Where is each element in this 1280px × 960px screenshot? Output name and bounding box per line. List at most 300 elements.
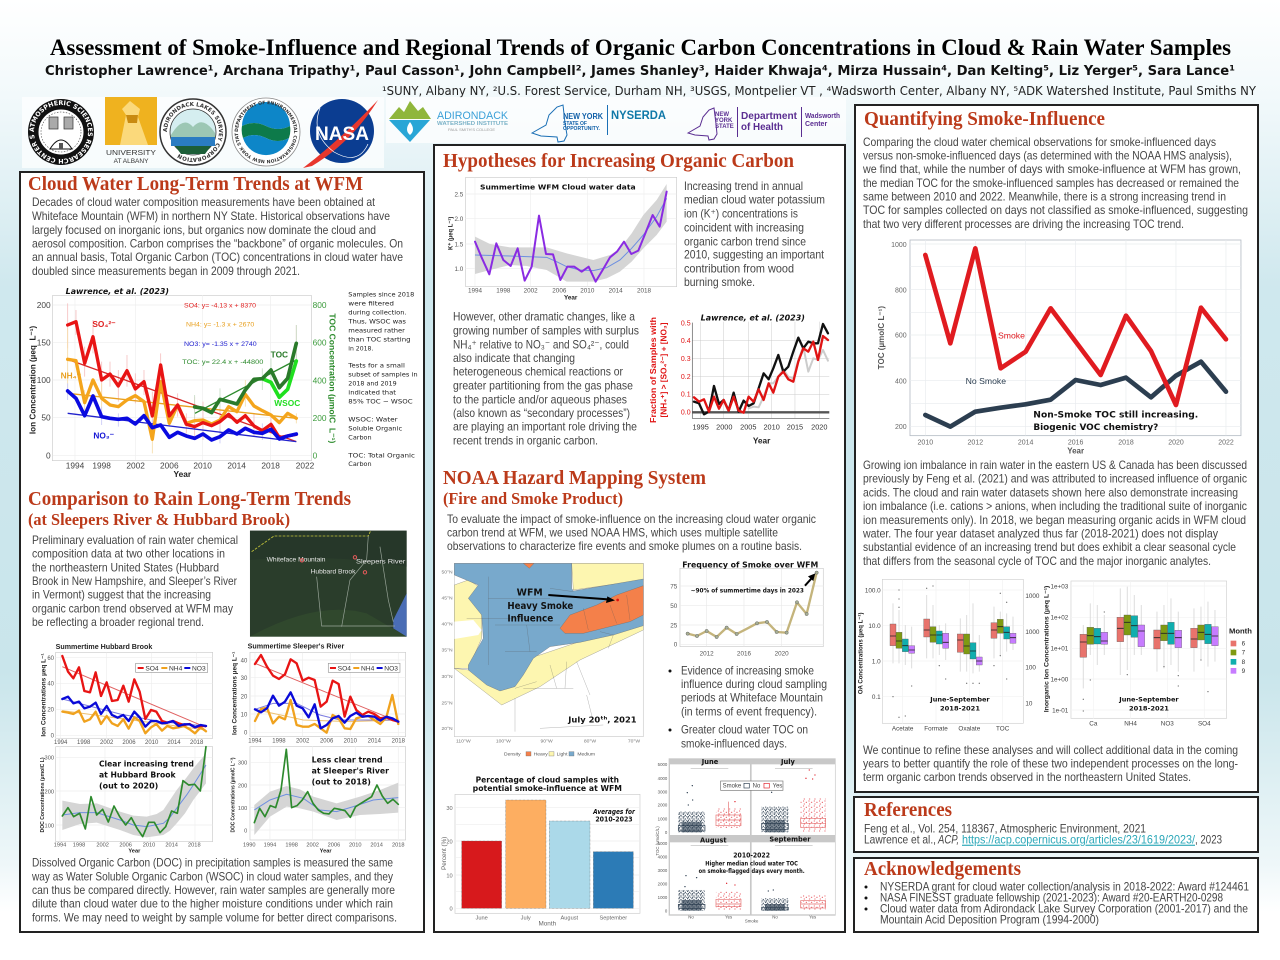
text block: secondary processes: greater partitioning from the gas phase — [453, 379, 633, 392]
legend — [136, 663, 208, 672]
chart: potassium trend: 2014 — [609, 288, 623, 295]
reference list: ACP, — [937, 834, 959, 847]
chart: percentage of cloud samples with smoke influence: Month — [539, 920, 557, 927]
chart: organic acid and TOC boxplots — [858, 579, 1040, 732]
text block: rain intro: composition data at two other locations in — [32, 548, 225, 561]
chart: organic acid and TOC boxplots: June-September — [929, 697, 991, 704]
legend: month: 7 — [1242, 650, 1246, 657]
text block: secondary processes: growing number of samples with surplus — [453, 324, 639, 337]
chart: fraction of samples with ammonium surplus: Lawrence, et al. (2023) — [701, 314, 805, 323]
logo: New York State NYSERDA: OPPORTUNITY. — [563, 126, 601, 132]
legend: NH4 — [169, 665, 183, 672]
chart: inorganic ion boxplots: SO4 — [1198, 721, 1211, 728]
chart: frequency of smoke over WFM: 0 — [674, 642, 678, 649]
heading: cloud water trends: Cloud Water Long-Term Trends at WFM — [28, 173, 363, 195]
heading: hypotheses: Hypotheses for Increasing Organic Carbon — [443, 150, 795, 172]
logo: NASA: NASA — [315, 124, 369, 145]
chart: inorganic ion boxplots: Inorganic Ion Concentrations (µeq L⁻¹) — [1044, 586, 1051, 712]
logo: University at Albany — [105, 97, 157, 165]
chart: TOC smoke vs no smoke: 2020 — [1168, 439, 1184, 446]
series labels: NO₃⁻ — [93, 431, 114, 441]
text block: rain intro: organic carbon trend observed at WFM may — [32, 602, 233, 615]
chart: percentage of cloud samples with smoke influence: 30 — [446, 806, 453, 812]
series labels: TOC — [271, 349, 288, 359]
chart: Sleepers River DOC: 300 — [238, 761, 247, 767]
chart: fraction of samples with ammonium surplus: 0.3 — [681, 356, 691, 363]
chart: TOC smoke vs no smoke: TOC (µmolC L⁻¹) — [877, 306, 886, 369]
map: satellite view of sites — [250, 531, 407, 637]
axes: 0 — [46, 451, 51, 461]
chart: Summertime Hubbard Brook ions — [40, 644, 213, 746]
chart: ion and TOC concentration long-term trend — [27, 287, 418, 479]
annotation — [312, 756, 389, 786]
chart: TOC smoke vs no smoke: 2012 — [968, 439, 983, 446]
text block: secondary processes: However, other dramatic changes, like a — [453, 311, 635, 324]
chart: TOC smoke vs no smoke: No Smoke — [966, 376, 1006, 386]
chart: Summertime Sleeper's River ions: 2014 — [368, 738, 382, 744]
axes: 50 — [41, 413, 51, 423]
chart: Summertime Hubbard Brook ions: 2002 — [100, 740, 114, 746]
text block: secondary processes: heterogeneous chemical reactions or — [453, 366, 623, 379]
coordinates: 100°W — [496, 738, 511, 744]
notes on samples: measured rather — [348, 328, 405, 335]
chart: Summertime Sleeper's River ions: 30 — [241, 676, 248, 682]
legend: Yes — [773, 784, 782, 790]
text block: secondary processes: are playing an important role driving the — [453, 421, 637, 434]
chart: percentage of cloud samples with smoke influence: 0 — [450, 907, 453, 913]
chart: organic acid and TOC boxplots: 10 — [1025, 700, 1033, 707]
legend: month: 9 — [1242, 668, 1246, 675]
chart: monthly TOC on smoke vs no-smoke days: 3000 — [658, 789, 668, 794]
chart: Summertime Hubbard Brook ions: 1994 — [54, 740, 68, 746]
text block: rain intro: Brook in New Hampshire, and Sleeper’s River — [32, 575, 237, 588]
chart: TOC smoke vs no smoke: Biogenic VOC chemistry? — [1033, 423, 1158, 433]
chart: percentage of cloud samples with smoke influence: 10 — [446, 873, 453, 879]
text block: DOC comparison: way as Water Soluble Organic Carbon (WSOC) in cloud water samples, and they — [31, 870, 393, 883]
coordinates: 80°W — [584, 738, 596, 744]
map: HMS smoke density: WFM — [517, 588, 543, 599]
text block: secondary processes — [453, 311, 639, 447]
chart: Sleepers River DOC: 200 — [238, 783, 247, 789]
chart: frequency of smoke over WFM: 2016 — [737, 651, 751, 658]
map: HMS smoke density: July 20ᵗʰ, 2021 — [567, 715, 637, 725]
axes: 400 — [313, 376, 327, 386]
chart: Summertime Hubbard Brook ions: 2018 — [190, 740, 204, 746]
reference list: Lawrence et al., — [864, 834, 936, 847]
text block: HMS intro: carbon trend at WFM, we used NOAA HMS, which uses multiple satellite — [447, 526, 778, 540]
chart: Summertime Hubbard Brook ions: 2014 — [167, 740, 181, 746]
regression equations: TOC: y= 22.4 x + -44800 — [182, 359, 264, 366]
regression equations — [182, 302, 264, 366]
chart: potassium trend: 2010 — [580, 288, 595, 295]
text block: potassium hypothesis: ion (K⁺) concentrations is — [684, 208, 798, 221]
chart: Hubbard Brook DOC: 2014 — [165, 843, 178, 849]
chart: monthly TOC on smoke vs no-smoke days: 0 — [665, 908, 668, 913]
chart: Hubbard Brook DOC: 1994 — [54, 843, 66, 849]
chart: Sleepers River DOC: DOC Concentrations (µmolC L⁻¹) — [230, 757, 237, 832]
logo: Adirondack Watershed Institute — [389, 101, 509, 142]
text block: ion imbalance: that differs from the seasonal cycle of TOC and the major inorganic analytes. — [863, 555, 1211, 568]
panel: acknowledgements — [854, 858, 1258, 932]
text block: ion imbalance — [862, 459, 1247, 568]
chart: ion and TOC concentration long-term trend: Lawrence, et al. (2023) — [66, 287, 169, 296]
chart: organic acid and TOC boxplots: Acetate — [892, 725, 914, 732]
chart: Summertime Hubbard Brook ions: Summertime Hubbard Brook — [56, 644, 152, 651]
axes: 1998 — [92, 461, 111, 471]
text block: evidence bullets — [668, 664, 827, 750]
chart: TOC smoke vs no smoke: 400 — [895, 378, 907, 385]
annotation: Clear increasing trend — [99, 760, 194, 769]
text block: secondary processes: NH₄⁺ relative to NO₃⁻ and SO₄²⁻, could — [453, 338, 629, 351]
text block: cloud water intro: Whiteface Mountain (WFM) in northern NY State. Historical observations have — [32, 210, 390, 223]
map: HMS smoke density: Heavy Smoke — [507, 601, 573, 612]
axes: 800 — [313, 300, 327, 310]
chart: monthly TOC on smoke vs no-smoke days: 2000 — [658, 882, 668, 887]
authors: Christopher Lawrence¹, Archana Tripathy¹, Paul Casson¹, John Campbell², James Shanley³, Haider Khwaja⁴, Mirza Hussain⁴, Dan Kelting⁵, Liz Yerger⁵, Sara Lance¹ — [45, 63, 1235, 79]
legend: Medium — [577, 752, 595, 758]
coordinates: 25°N — [442, 700, 453, 706]
heading: acknowledgements: Acknowledgements — [864, 858, 1021, 880]
boxes — [678, 823, 788, 910]
chart: potassium trend: 2.0 — [455, 216, 464, 223]
chart: fraction of samples with ammonium surplus: 0.2 — [681, 374, 691, 381]
chart: Summertime Sleeper's River ions: 40 — [241, 658, 248, 664]
chart: monthly TOC on smoke vs no-smoke days: Smoke — [745, 919, 759, 924]
notes on samples: Thus, WSOC was — [347, 319, 406, 326]
notes on samples: than TOC starting — [348, 337, 411, 344]
text block: potassium hypothesis: Increasing trend in annual — [684, 180, 803, 193]
legend: month: Month — [1229, 627, 1252, 636]
legend: SO4 — [338, 665, 351, 672]
medium smoke — [454, 563, 643, 691]
regression equations: SO4: y= -4.13 x + 8370 — [184, 302, 256, 309]
logo: New York State NYSERDA: NYSERDA — [611, 108, 666, 122]
coordinates: 30°N — [442, 674, 453, 680]
annotation: at Sleeper's River — [312, 766, 389, 775]
chart: Hubbard Brook DOC: 300 — [45, 756, 54, 762]
heading: quantifying: Quantifying Smoke-Influence — [864, 108, 1105, 130]
panel: middle column hypotheses and HMS — [434, 145, 845, 932]
chart: frequency of smoke over WFM: 2020 — [775, 651, 789, 658]
chart: fraction of samples with ammonium surplus: 0.1 — [681, 392, 691, 399]
heading: NOAA HMS: (Fire and Smoke Product) — [443, 489, 623, 508]
notes on samples: TOC: Total Organic — [347, 452, 416, 459]
chart: Sleepers River DOC: 2014 — [370, 843, 383, 849]
chart: monthly TOC on smoke vs no-smoke days: 5000 — [658, 762, 668, 767]
chart: fraction of samples with ammonium surplus: 2005 — [740, 423, 756, 432]
arrow to WFM — [548, 595, 619, 603]
notes on samples: subset of samples in — [348, 371, 418, 378]
annotation — [99, 760, 194, 790]
acknowledgement list: Mountain Acid Deposition Program (1994-2000) — [880, 913, 1099, 926]
axes: 600 — [313, 338, 327, 348]
text block: cloud water intro: Decades of cloud water composition measurements have been obtained at — [32, 196, 376, 209]
facet titles: June — [701, 758, 719, 766]
chart: inorganic ion boxplots: 1e-01 — [1052, 707, 1069, 714]
series labels: SO₄²⁻ — [92, 319, 115, 329]
chart: monthly TOC on smoke vs no-smoke days: Yes — [725, 915, 732, 920]
chart: potassium trend: 2.5 — [455, 191, 464, 198]
regression equations: NH4: y= -1.3 x + 2670 — [186, 322, 255, 329]
text block: ion imbalance: ion imbalance (i.e. cations > anions, when including the traditional suite of inorganic — [863, 500, 1247, 513]
chart: monthly TOC on smoke vs no-smoke days: 3000 — [658, 868, 668, 873]
logo: New York Department of Health Wadsworth Center: Department — [741, 110, 797, 122]
logo: NASA — [303, 99, 378, 168]
chart: Sleepers River DOC: 2018 — [392, 843, 405, 849]
chart: monthly TOC on smoke vs no-smoke days: 4000 — [658, 854, 668, 859]
chart: percentage of cloud samples with smoke influence: August — [561, 916, 579, 922]
chart: inorganic ion boxplots: Ca — [1089, 721, 1098, 728]
chart: monthly TOC on smoke vs no-smoke days: 2000 — [658, 803, 668, 808]
chart: TOC smoke vs no smoke — [877, 240, 1241, 455]
chart: frequency of smoke over WFM: 25 — [670, 622, 678, 629]
chart: TOC smoke vs no smoke: Non-Smoke TOC still increasing. — [1033, 410, 1198, 420]
heading: NOAA HMS: NOAA Hazard Mapping System — [443, 467, 706, 489]
map: HMS smoke density: Influence — [507, 613, 553, 624]
chart: Hubbard Brook DOC: DOC Concentrations (µmolC L) — [40, 757, 46, 832]
chart: monthly TOC on smoke vs no-smoke days: 0 — [665, 830, 668, 835]
chart: organic acid and TOC boxplots: 1000 — [1025, 629, 1040, 636]
axes: 2014 — [227, 461, 246, 471]
chart: monthly TOC on smoke vs no-smoke days: Yes — [809, 915, 816, 920]
chart: TOC smoke vs no smoke: 2014 — [1018, 439, 1034, 446]
text block: secondary processes: (also known as “secondary processes”) — [453, 407, 630, 420]
text block: smoke vs non-smoke: TOC for samples collected on days not classified as smoke-influenced, suggesting — [863, 204, 1248, 217]
map: satellite view of sites: Sleepers River — [356, 558, 406, 565]
axes: 2002 — [126, 461, 145, 471]
text block: rain intro — [32, 534, 238, 629]
chart: Summertime Sleeper's River ions — [232, 643, 406, 744]
notes on samples: indicated that — [348, 389, 397, 396]
chart: monthly TOC on smoke vs no-smoke days: 4000 — [658, 776, 668, 781]
chart: organic acid and TOC boxplots: 1000 — [1025, 593, 1040, 600]
chart: frequency of smoke over WFM: 75 — [670, 583, 678, 590]
chart: frequency of smoke over WFM — [670, 561, 823, 658]
chart: percentage of cloud samples with smoke influence: July — [521, 916, 531, 922]
text block: DOC comparison: dilute than cloud water due to the higher moisture conditions under which rain — [32, 898, 393, 911]
chart: TOC smoke vs no smoke: 2010 — [918, 439, 933, 446]
notes on samples — [347, 292, 418, 468]
chart: Summertime Sleeper's River ions: Ion Concentrations µeq L⁻¹ — [232, 652, 239, 735]
chart: inorganic ion boxplots: 1e+02 — [1051, 615, 1069, 622]
text block: potassium hypothesis: organic carbon trend since — [684, 235, 806, 248]
annotation — [699, 851, 805, 875]
chart: inorganic ion boxplots: 2018-2021 — [1129, 705, 1169, 712]
axes: 200 — [313, 413, 327, 423]
heading: rain comparison: Comparison to Rain Long-Term Trends — [28, 488, 351, 510]
chart: percentage of cloud samples with smoke influence: Averages for — [592, 808, 635, 816]
chart: potassium trend: 1.5 — [455, 241, 464, 248]
text block: HMS intro: To evaluate the impact of smoke-influence on the increasing cloud water organic — [447, 513, 816, 526]
legend: Smoke — [723, 784, 742, 790]
text block: evidence bullets: influence during cloud sampling — [681, 678, 827, 691]
axes: Ion Concentration (µeq L⁻¹) — [27, 326, 37, 434]
chart: percentage of cloud samples with smoke influence: potential smoke-influence at WFM — [473, 784, 622, 793]
reference list: Feng et al., Vol. 254, 118367, Atmospheric Environment, 2021 — [864, 823, 1146, 836]
text block: smoke vs non-smoke: same between 2010 and 2022. Meanwhile, there is a strong increasing trend in — [863, 190, 1226, 204]
chart: potassium trend: Summertime WFM Cloud water data — [480, 182, 636, 191]
annotation: 2010-2022 — [733, 851, 770, 860]
axes: 150 — [37, 338, 51, 348]
logo: University at Albany: AT ALBANY — [114, 158, 149, 165]
chart: Summertime Sleeper's River ions: 2010 — [344, 738, 358, 744]
notes on samples: in 2018. — [348, 345, 373, 352]
text block: rain intro: the northeastern United States (Hubbard — [32, 561, 219, 574]
text block: HMS intro — [447, 513, 816, 553]
legend: NO3 — [192, 665, 206, 672]
axes: 200 — [37, 300, 51, 310]
chart: Summertime Hubbard Brook ions: 1998 — [77, 740, 91, 746]
series labels: NH₄⁺ — [61, 371, 81, 381]
logo: New York Department of Health Wadsworth Center — [688, 107, 840, 140]
text block: outlook: We continue to refine these analyses and will collect additional data in the coming — [863, 744, 1238, 757]
chart: monthly TOC on smoke vs no-smoke days: 1000 — [658, 895, 668, 900]
chart: fraction of samples with ammonium surplus: 2020 — [811, 423, 827, 432]
notes on samples: during collection. — [348, 310, 407, 317]
text block: potassium hypothesis: 2010, suggesting an important — [684, 249, 825, 262]
chart: monthly TOC on smoke vs no-smoke days: No — [688, 915, 694, 920]
logo: New York Department of Health Wadsworth Center: Wadsworth — [805, 113, 840, 120]
chart: Summertime Sleeper's River ions: 10 — [241, 712, 248, 718]
axes: 2018 — [261, 461, 280, 471]
text block: rain intro: be reflecting a broader regional trend. — [32, 616, 204, 629]
logo: New York State NYSERDA: NEW YORK — [563, 112, 603, 121]
chart: organic acid and TOC boxplots: TOC — [996, 725, 1010, 732]
text block: cloud water intro: doubled since measurements began in 2009 through 2021. — [32, 265, 300, 278]
text block: smoke vs non-smoke: we find that, while the number of days with smoke-influence at WFM has grown, — [862, 163, 1241, 176]
chart: Summertime Hubbard Brook ions: 40 — [47, 682, 55, 688]
text block: outlook — [863, 744, 1238, 784]
chart: potassium trend: 1.0 — [455, 266, 464, 273]
annotation: on smoke-flagged days every month. — [699, 868, 805, 875]
text block: ion imbalance: substantial evidence of an increasing trend but does exhibit a clear seasonal cycle — [863, 541, 1236, 554]
text block: HMS intro: observations to characterize fire events and smoke plumes on a routine basis. — [447, 540, 802, 553]
chart: Hubbard Brook DOC: 2010 — [143, 843, 155, 849]
text block: DOC comparison: forms. We may need to weight by sample volume for better direct comparisons. — [32, 911, 397, 924]
chart: Hubbard Brook DOC: 1998 — [73, 843, 85, 849]
text block: rain intro: Preliminary evaluation of rain water chemical — [32, 534, 238, 547]
logo: University at Albany: UNIVERSITY — [106, 148, 156, 157]
axes: 2022 — [296, 461, 315, 471]
text block: evidence bullets: periods at Whiteface Mountain — [681, 692, 823, 705]
axes: 2006 — [160, 461, 179, 471]
axes — [27, 300, 337, 479]
acknowledgement list: NASA FINESST graduate fellowship (2021-2023): Award #20-EARTH20-0298 — [880, 891, 1223, 904]
chart: fraction of samples with ammonium surplus: [NH₄⁺] > [SO₄²⁻] + [NO₃] — [660, 322, 669, 417]
text block: cloud water intro: an annual basis, Total Organic Carbon (TOC) concentrations in cloud water have — [32, 251, 403, 264]
series labels: WSOC — [274, 398, 300, 408]
chart: Summertime Sleeper's River ions: 2018 — [392, 738, 406, 744]
chart: potassium trend: 2018 — [637, 288, 651, 295]
coordinates: 70°W — [628, 738, 640, 744]
chart: potassium trend: 2002 — [524, 288, 538, 295]
notes on samples: were filtered — [348, 301, 394, 308]
chart: TOC smoke vs no smoke: 200 — [895, 424, 907, 431]
affiliations: ¹SUNY, Albany NY, ²U.S. Forest Service, Durham NH, ³USGS, Montpelier VT , ⁴Wadsworth Center, Albany NY, ⁵ADK Watershed Institute, Paul Smiths NY — [382, 84, 1257, 98]
reference list: , 2023 — [1195, 834, 1222, 847]
notes on samples: Soluble Organic — [348, 426, 403, 433]
notes on samples: WSOC: Water — [348, 417, 398, 424]
logo: New York Department of Health Wadsworth Center: of Health — [741, 121, 783, 133]
chart: organic acid and TOC boxplots: Oxalate — [958, 725, 981, 732]
chart: inorganic ion boxplots: NH4 — [1124, 721, 1137, 728]
chart: Hubbard Brook DOC: Year — [128, 848, 141, 854]
chart: potassium trend — [447, 177, 677, 301]
legend: month — [1229, 627, 1252, 675]
text block: potassium hypothesis: contribution from wood — [684, 262, 794, 275]
heading: references: References — [864, 799, 952, 821]
chart: monthly TOC on smoke vs no-smoke days: No — [772, 915, 778, 920]
heading: rain comparison: (at Sleepers River & Hubbard Brook) — [28, 510, 290, 529]
title: Assessment of Smoke-Influence and Regional Trends of Organic Carbon Concentrations in Cloud & Rain Water Samples — [50, 35, 1231, 61]
chart: Hubbard Brook DOC: 2002 — [96, 843, 109, 849]
chart: TOC smoke vs no smoke: 800 — [895, 287, 907, 294]
text block: evidence bullets: Greater cloud water TOC on — [681, 723, 808, 736]
chart: Sleepers River DOC: Year — [320, 848, 332, 854]
chart: fraction of samples with ammonium surplus: 0.4 — [681, 338, 691, 345]
annotation: (out to 2020) — [99, 781, 158, 790]
map: satellite view of sites: Whiteface Mountain — [267, 556, 326, 563]
chart: inorganic ion boxplots: 1e+03 — [1051, 583, 1069, 590]
text block: outlook: term organic carbon trends observed in the northeastern United States. — [863, 771, 1191, 784]
coordinates — [442, 569, 640, 744]
chart: Sleepers River DOC: 0 — [244, 828, 247, 834]
chart: Summertime Hubbard Brook ions: 2010 — [145, 740, 159, 746]
text block: secondary processes: recent trends in organic carbon. — [453, 434, 598, 447]
chart: fraction of samples with ammonium surplus: 1995 — [692, 423, 709, 432]
logo: New York Department of Health Wadsworth Center: NEW — [715, 112, 729, 118]
text block: smoke vs non-smoke: the median TOC for the smoke-influenced samples has decreased or remained the — [863, 177, 1239, 190]
text block: potassium hypothesis: burning smoke. — [684, 276, 755, 289]
series labels — [61, 319, 300, 441]
chart: percentage of cloud samples with smoke influence: Percentage of cloud samples with — [476, 775, 619, 784]
text block: evidence bullets: Evidence of increasing smoke — [681, 664, 814, 677]
text block: ion imbalance: ion measurements only). In 2018, we began measuring organic acids in WFM cloud — [863, 514, 1246, 527]
chart: Summertime Sleeper's River ions: Summertime Sleeper's River — [248, 643, 345, 650]
chart: percentage of cloud samples with smoke influence: 2010-2023 — [595, 816, 633, 824]
text block: evidence bullets: (in terms of event frequency). — [681, 705, 817, 718]
logo: Adirondack Lakes Survey Corporation: ADIRONDACK LAKES SURVEY CORPORATION — [163, 102, 224, 162]
reference list: https://acp.copernicus.org/articles/23/1619/2023/ — [962, 834, 1196, 847]
axes: Year — [174, 469, 192, 479]
chart: monthly TOC on smoke vs no-smoke days: 5000 — [658, 841, 668, 846]
logo: Adirondack Watershed Institute: PAUL SMITH'S COLLEGE — [448, 127, 495, 132]
coordinates: 20°N — [442, 726, 453, 732]
legend: month: 6 — [1242, 641, 1246, 648]
chart: TOC smoke vs no smoke: Smoke — [998, 330, 1025, 340]
coordinates: 50°N — [442, 569, 453, 575]
logo: NYS DEC — [232, 98, 300, 166]
chart: frequency of smoke over WFM: 2012 — [700, 651, 714, 658]
coordinates: 110°W — [456, 738, 471, 744]
legend: NH4 — [361, 665, 375, 672]
text block: DOC comparison: can thus be compared directly. However, rain water samples are generally more — [32, 884, 395, 897]
axes: 0 — [313, 451, 318, 461]
chart: fraction of samples with ammonium surplus: 2010 — [763, 423, 780, 432]
chart: fraction of samples with ammonium surplus — [649, 314, 829, 445]
text block: potassium hypothesis — [684, 180, 825, 289]
text block: outlook: years to better quantify the role of these two independent processes on the long- — [863, 758, 1238, 770]
logo: New York Department of Health Wadsworth Center: STATE — [715, 124, 734, 130]
text block: cloud water intro — [32, 196, 403, 278]
legend: No — [753, 784, 761, 790]
chart: Sleepers River DOC: 2006 — [328, 843, 340, 849]
chart: Hubbard Brook DOC: 100 — [45, 823, 54, 829]
text block: potassium hypothesis: median cloud water potassium — [684, 194, 825, 207]
chart: Summertime Sleeper's River ions: 0 — [244, 731, 248, 737]
chart: TOC smoke vs no smoke: 2018 — [1118, 439, 1134, 446]
notes on samples: Tests for a small — [347, 362, 405, 369]
